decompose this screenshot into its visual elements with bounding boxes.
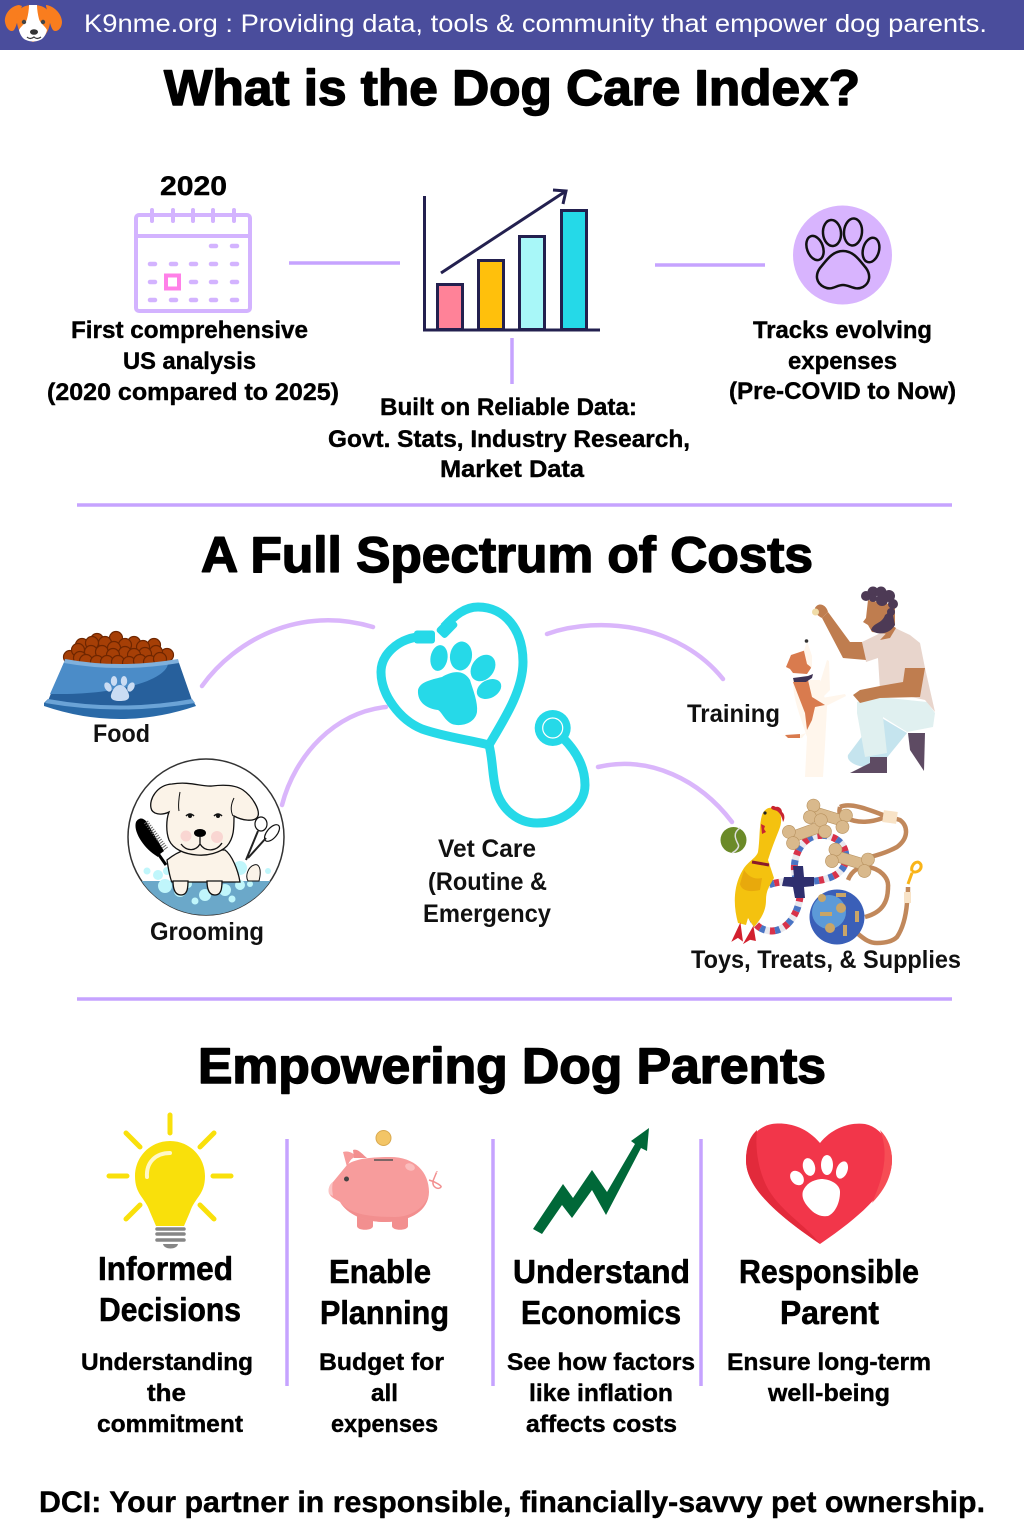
caption: built on reliable data: Built on Reliable Data: <box>380 394 637 421</box>
icon: dog logo <box>5 5 62 42</box>
icon: rope toy <box>751 835 846 931</box>
text: see how factors like inflation affects costs: like inflation <box>529 1380 673 1407</box>
caption: first comprehensive analysis: (2020 compared to 2025) <box>47 379 339 406</box>
text: see how factors like inflation affects costs: affects costs <box>526 1411 677 1438</box>
label: vet care <box>423 835 551 928</box>
icon: groomed puppy <box>128 759 284 915</box>
connector curves <box>202 620 732 822</box>
icon: stethoscope with paw <box>381 607 585 823</box>
connector: chart to paw <box>655 263 765 267</box>
heading: enable planning: Enable <box>329 1253 431 1290</box>
caption: tracks evolving expenses: expenses <box>788 348 897 375</box>
label: training: Training <box>687 700 780 728</box>
text: see how factors like inflation affects costs: See how factors <box>507 1349 695 1376</box>
heading: understand economics: Economics <box>521 1294 681 1331</box>
connector: chart to caption <box>510 338 514 384</box>
text: see how factors like inflation affects costs <box>507 1349 695 1438</box>
text: budget for all expenses: all <box>371 1380 398 1407</box>
title: What is the Dog Care Index: What is the Dog Care Index? <box>164 60 860 116</box>
column: informed decisions <box>81 1115 253 1438</box>
icon: blue ball <box>810 890 864 944</box>
icon: piggy bank <box>329 1130 441 1230</box>
heading: understand economics: Understand <box>513 1253 690 1290</box>
icon: food bowl <box>44 632 196 719</box>
caption: built on reliable data: Market Data <box>440 456 585 483</box>
heading: enable planning <box>320 1253 449 1331</box>
panel: what is the index <box>47 171 956 483</box>
text: budget for all expenses <box>319 1349 444 1438</box>
text: ensure long-term well-being: well-being <box>767 1380 890 1407</box>
column: responsible parent <box>727 1123 931 1407</box>
caption: built on reliable data <box>328 394 690 483</box>
caption: first comprehensive analysis <box>47 317 339 406</box>
icon: calendar <box>136 210 250 311</box>
icon: paw in circle <box>793 206 892 304</box>
text: budget for all expenses: expenses <box>331 1411 438 1438</box>
text: ensure long-term well-being <box>727 1349 931 1407</box>
label: vet care: Vet Care <box>438 835 536 863</box>
label: food: Food <box>93 720 150 748</box>
caption: first comprehensive analysis: First comprehensive <box>71 317 308 344</box>
label: vet care: (Routine & <box>428 868 547 896</box>
text: budget for all expenses: Budget for <box>319 1349 444 1376</box>
icon: lightbulb <box>109 1115 231 1248</box>
text: ensure long-term well-being: Ensure long-term <box>727 1349 931 1376</box>
caption: tracks evolving expenses <box>729 317 956 405</box>
panel: spectrum of costs <box>44 586 961 974</box>
icon: rubber chicken <box>733 806 784 942</box>
footer statement: DCI: Your partner in responsible, financially-savvy pet ownership. <box>39 1486 985 1519</box>
heading: understand economics <box>513 1253 690 1331</box>
text: understanding the commitment <box>81 1349 253 1438</box>
header tagline: K9nme.org : Providing data, tools & community that empower dog parents. <box>84 10 987 38</box>
label: grooming: Grooming <box>150 918 264 946</box>
panel: empowering dog parents <box>81 1115 931 1438</box>
icon: heart with paw <box>746 1123 892 1244</box>
heading: responsible parent <box>739 1253 919 1331</box>
caption: first comprehensive analysis: US analysis <box>123 348 256 375</box>
heading: informed decisions <box>98 1250 241 1328</box>
caption: built on reliable data: Govt. Stats, Industry Research, <box>328 426 690 453</box>
icon: tennis ball <box>720 827 746 853</box>
icon: rising bar chart <box>424 190 600 330</box>
illustration: toys treats and supplies <box>720 797 921 944</box>
caption: tracks evolving expenses: Tracks evolving <box>753 317 932 344</box>
heading: responsible parent: Parent <box>780 1294 879 1331</box>
year label: 2020 <box>160 171 227 201</box>
heading: informed decisions: Decisions <box>99 1291 241 1328</box>
heading: enable planning: Planning <box>320 1294 449 1331</box>
illustration: man training dog <box>775 586 935 777</box>
icon: bones <box>781 797 876 879</box>
caption: tracks evolving expenses: (Pre-COVID to Now) <box>729 378 956 405</box>
column: understand economics <box>507 1128 695 1438</box>
column: enable planning <box>319 1130 449 1438</box>
header banner <box>0 0 1024 50</box>
icon: cross knot <box>782 866 814 898</box>
heading: empowering dog parents: Empowering Dog Parents <box>198 1038 826 1094</box>
heading: responsible parent: Responsible <box>739 1253 919 1290</box>
icon: rising trend arrow <box>533 1128 649 1234</box>
label: toys treats supplies: Toys, Treats, & Supplies <box>691 946 961 974</box>
connector: calendar to chart <box>289 261 400 265</box>
heading: informed decisions: Informed <box>98 1250 233 1287</box>
text: understanding the commitment: commitment <box>97 1411 243 1438</box>
icon: leash <box>839 805 921 943</box>
text: understanding the commitment: Understanding <box>81 1349 253 1376</box>
label: vet care: Emergency <box>423 900 551 928</box>
heading: a full spectrum of costs: A Full Spectrum of Costs <box>201 527 813 583</box>
text: understanding the commitment: the <box>147 1380 186 1407</box>
